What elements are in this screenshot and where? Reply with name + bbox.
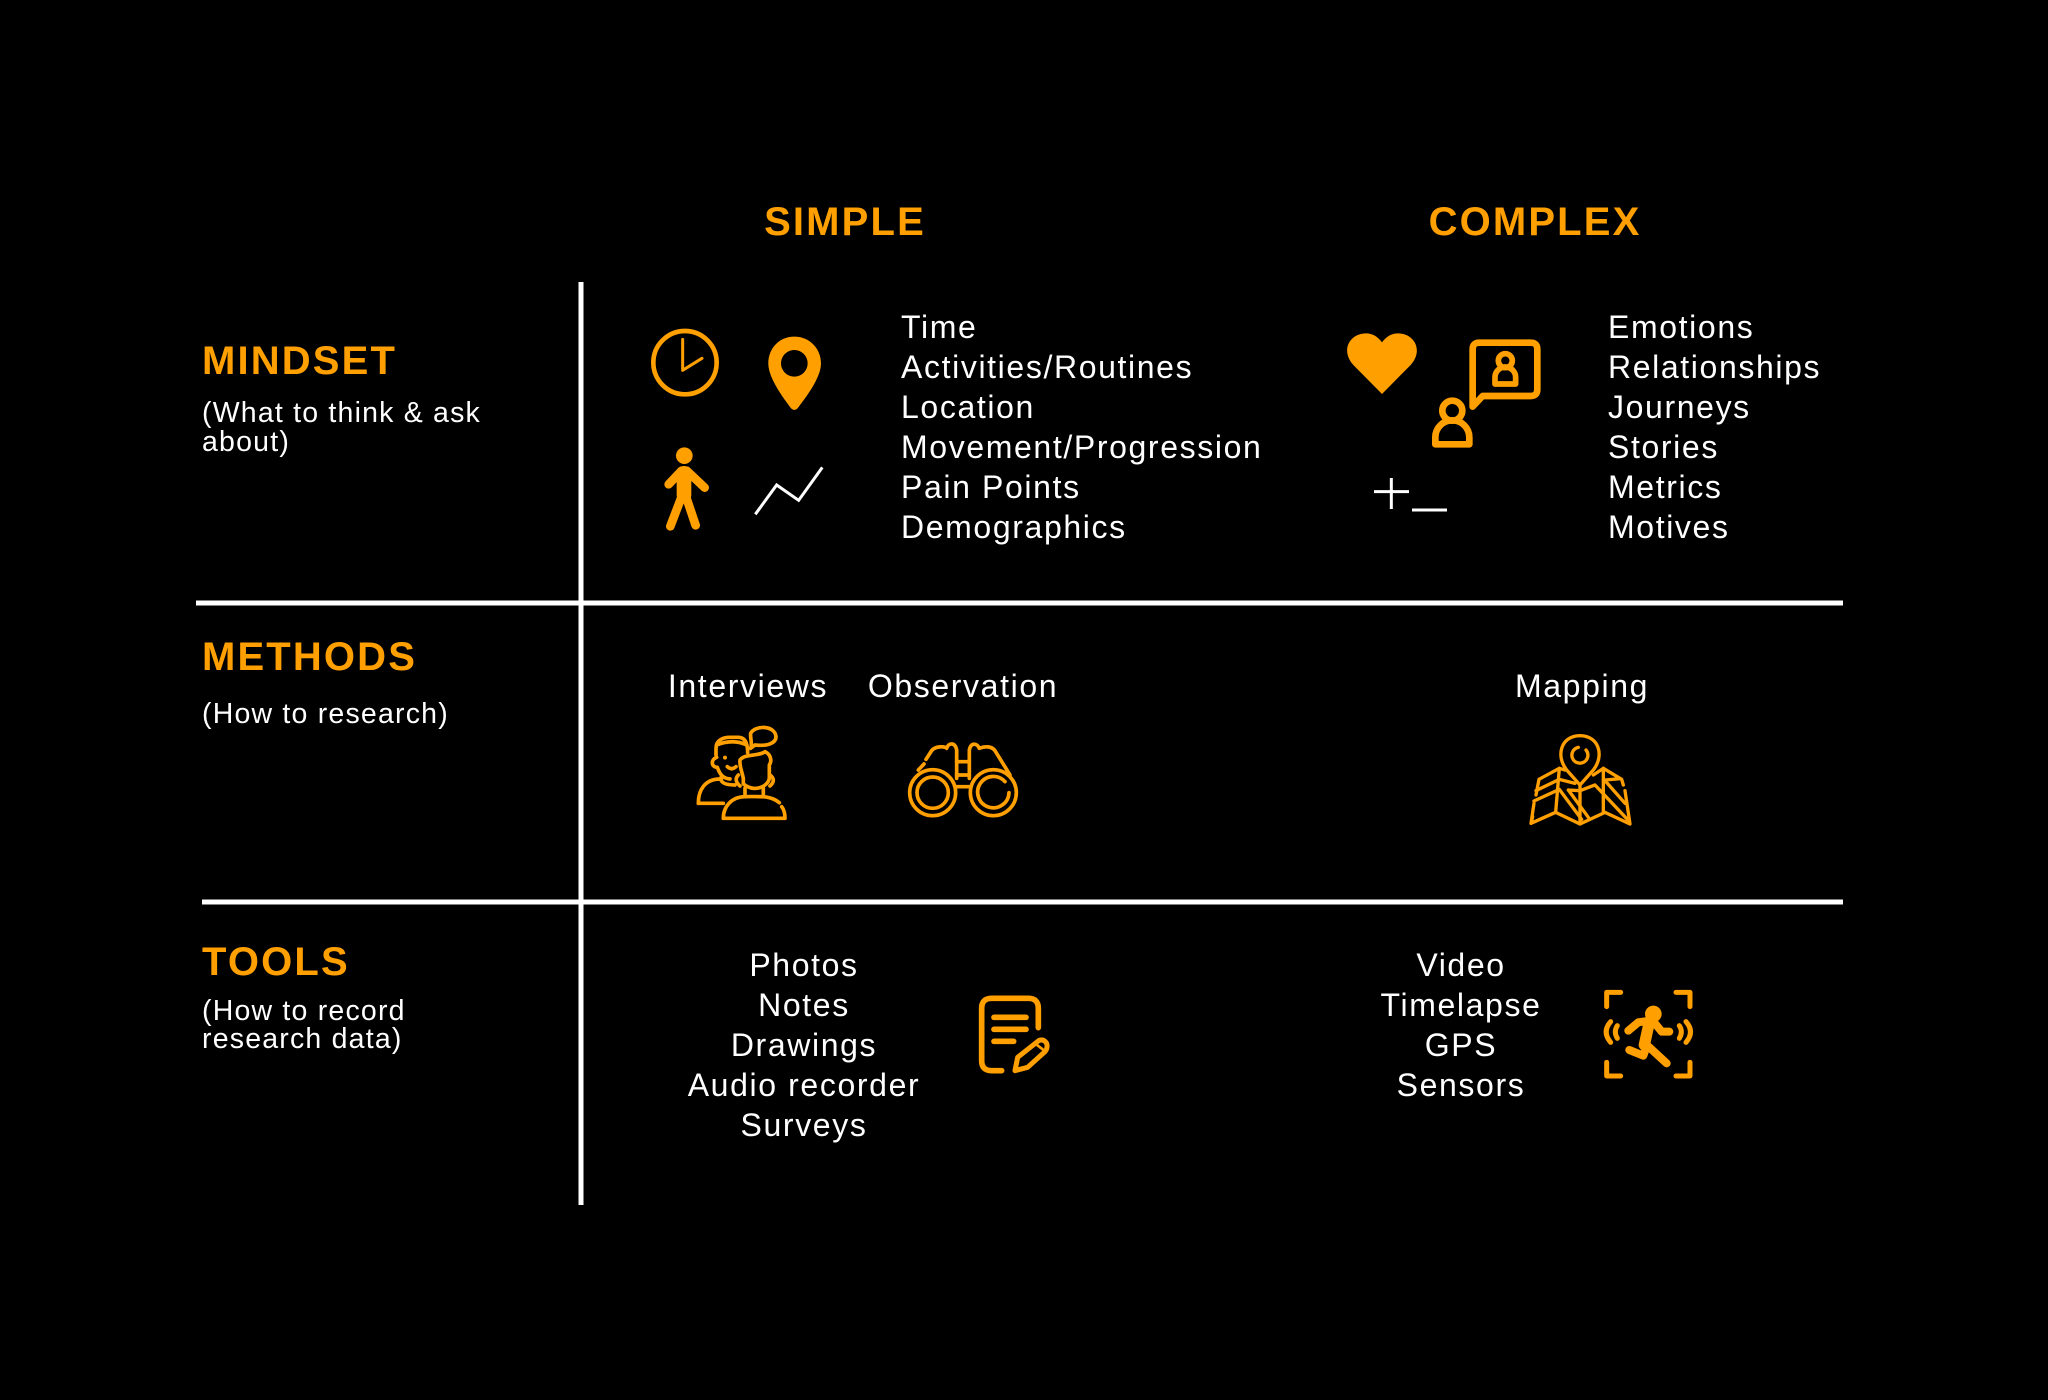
list: simple tools: Photos — [749, 947, 859, 983]
label: interviews: Interviews — [668, 668, 828, 704]
row heading: tools: (How to record — [202, 995, 406, 1027]
list: complex tools: Timelapse — [1380, 987, 1542, 1023]
row heading: methods: (How to research) — [202, 698, 449, 730]
icon: plus minus — [1374, 478, 1447, 510]
list: complex mindset: Relationships — [1608, 349, 1821, 385]
icon: binoculars — [910, 744, 1016, 816]
icon: two people talking — [1435, 343, 1537, 444]
list: simple tools: Audio recorder — [688, 1067, 920, 1103]
label: mapping: Mapping — [1515, 668, 1649, 704]
icon: walking person — [669, 447, 705, 526]
list: simple mindset: Demographics — [901, 509, 1127, 545]
list: complex tools: Sensors — [1397, 1067, 1525, 1103]
column heading: simple: SIMPLE — [764, 200, 926, 244]
list: complex mindset: Stories — [1608, 429, 1719, 465]
icon: map with pin — [1531, 736, 1630, 824]
list: simple mindset: Time — [901, 309, 977, 345]
list: complex tools: Video — [1416, 947, 1506, 983]
list: complex mindset: Metrics — [1608, 469, 1722, 505]
list: complex mindset: Journeys — [1608, 389, 1751, 425]
icon: motion sensor runner — [1606, 992, 1690, 1076]
icon: heart — [1347, 333, 1417, 394]
row heading: mindset: about) — [202, 426, 290, 458]
list: simple mindset: Location — [901, 389, 1035, 425]
icon: line chart — [755, 467, 822, 514]
list: complex mindset: Motives — [1608, 509, 1730, 545]
row heading: tools: TOOLS — [202, 940, 350, 984]
row heading: mindset: MINDSET — [202, 339, 397, 383]
list: simple mindset: Pain Points — [901, 469, 1081, 505]
row heading: methods — [202, 635, 449, 730]
list: simple tools: Drawings — [731, 1027, 877, 1063]
row heading: methods: METHODS — [202, 635, 417, 679]
list: complex tools — [1380, 947, 1542, 1103]
row heading: tools: research data) — [202, 1023, 403, 1055]
icon: clock — [653, 331, 717, 394]
list: simple tools — [688, 947, 920, 1143]
list: simple mindset: Movement/Progression — [901, 429, 1262, 465]
list: simple tools: Surveys — [741, 1107, 867, 1143]
list: complex tools: GPS — [1425, 1027, 1497, 1063]
icon: notepad and pencil — [982, 998, 1047, 1071]
row heading: tools — [202, 940, 406, 1055]
icon: location pin — [768, 337, 821, 410]
list: simple mindset — [901, 309, 1262, 545]
row heading: mindset — [202, 339, 481, 458]
column heading: complex: COMPLEX — [1429, 200, 1641, 244]
list: complex mindset: Emotions — [1608, 309, 1754, 345]
label: observation: Observation — [868, 668, 1058, 704]
row heading: mindset: (What to think & ask — [202, 397, 481, 429]
list: complex mindset — [1608, 309, 1821, 545]
list: simple mindset: Activities/Routines — [901, 349, 1193, 385]
list: simple tools: Notes — [758, 987, 850, 1023]
icon: interview people — [698, 727, 785, 818]
